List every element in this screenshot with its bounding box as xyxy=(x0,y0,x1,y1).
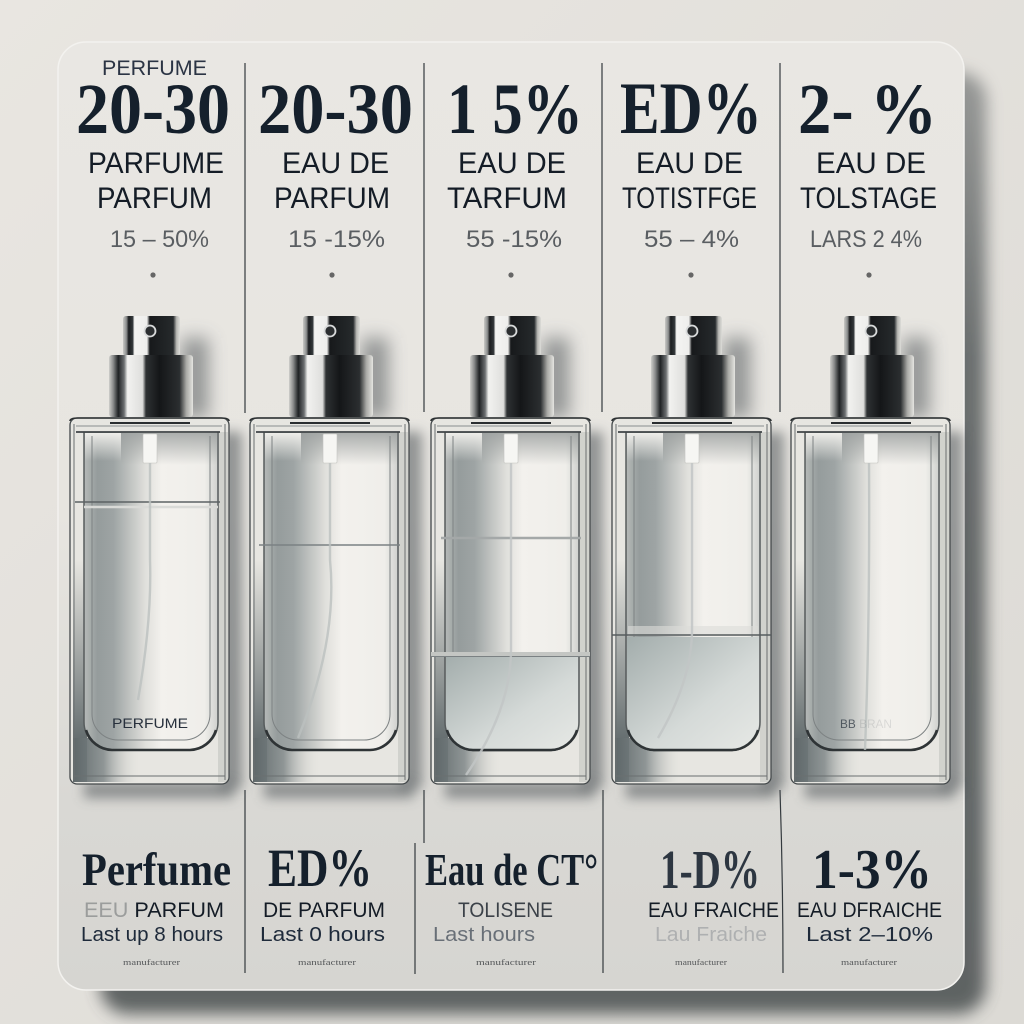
fine print: manufacturer xyxy=(123,958,180,967)
product name: 1-D% xyxy=(660,839,760,900)
dip tube xyxy=(658,463,692,738)
duration: Last hours xyxy=(433,924,535,946)
product name: ED% xyxy=(268,838,372,898)
concentration name line 2: TOTISTFGE xyxy=(622,182,757,215)
bottle 3 xyxy=(431,316,603,798)
duration: Last 0 hours xyxy=(260,924,385,946)
percentage range: 55 -15% xyxy=(466,226,562,253)
big figure: 20-30: 20-30 xyxy=(76,69,230,149)
duration: Lau Fraiche xyxy=(655,924,767,946)
fine print: manufacturer xyxy=(675,958,727,967)
bottle 4 xyxy=(612,316,784,798)
product name: Perfume xyxy=(82,844,231,896)
concentration name: EAU DE xyxy=(282,147,389,180)
product type: DE PARFUM xyxy=(263,899,385,922)
product type: TOLISENE xyxy=(458,899,553,922)
liquid levels xyxy=(441,537,581,539)
dot marker xyxy=(150,272,156,278)
dip tube xyxy=(138,463,150,700)
column 4 footer text xyxy=(648,839,779,967)
column 5 footer text xyxy=(797,839,942,967)
percentage range: 15 – 50% xyxy=(110,226,209,253)
liquid body xyxy=(627,637,759,749)
dot marker xyxy=(329,272,335,278)
dot marker xyxy=(508,272,514,278)
percentage range: 55 – 4% xyxy=(644,226,739,253)
bottle label: PERFUME xyxy=(112,715,188,731)
dip tube xyxy=(865,463,869,750)
dip tube xyxy=(466,463,511,775)
bottle 1 xyxy=(70,316,242,798)
column 5 header text xyxy=(798,69,937,278)
column 3 header text xyxy=(447,69,583,278)
duration: Last up 8 hours xyxy=(81,924,223,946)
liquid level xyxy=(75,501,220,503)
bottle 5 xyxy=(791,316,963,798)
column 1 header text xyxy=(76,57,230,278)
bottle label: BB BRAN xyxy=(840,717,892,731)
column 3 footer text xyxy=(425,845,598,967)
concentration name line 2: PARFUM xyxy=(274,182,390,215)
liquid level xyxy=(259,544,400,546)
percentage range: 15 -15% xyxy=(288,226,385,253)
fine print: manufacturer xyxy=(841,958,897,967)
concentration name line 2: PARFUM xyxy=(97,182,212,215)
liquid surface xyxy=(628,626,758,636)
bottle 2 xyxy=(250,316,422,798)
dot marker xyxy=(688,272,694,278)
dip tube xyxy=(298,463,331,738)
product name: Eau de CT° xyxy=(425,845,598,895)
concentration name: EAU DE xyxy=(816,147,926,180)
dot marker xyxy=(866,272,872,278)
product name: 1-3% xyxy=(812,839,932,901)
liquid body xyxy=(446,656,578,749)
concentration name line 2: TOLSTAGE xyxy=(800,182,937,215)
small title: perfume: PERFUME xyxy=(102,57,207,80)
column 2 header text xyxy=(258,69,413,278)
big figure: 15%: 1 5% xyxy=(447,69,583,149)
concentration name: PARFUME xyxy=(88,147,224,180)
column 2 footer text xyxy=(260,838,385,967)
column 1 footer text xyxy=(81,844,231,967)
percentage range: LARS 2 4% xyxy=(810,226,922,253)
product type: EEU PARFUM xyxy=(84,899,224,922)
fine print: manufacturer xyxy=(298,958,356,967)
duration: Last 2–10% xyxy=(806,924,933,946)
fine print: manufacturer xyxy=(476,958,536,967)
concentration name: EAU DE xyxy=(636,147,743,180)
concentration name: EAU DE xyxy=(458,147,566,180)
big figure: 2-%: 2- % xyxy=(798,69,937,149)
product type: EAU FRAICHE xyxy=(648,899,779,922)
product type: EAU DFRAICHE xyxy=(797,899,942,922)
column 4 header text xyxy=(620,68,762,278)
big figure: ED%: ED% xyxy=(620,68,762,150)
big figure: 20-30: 20-30 xyxy=(258,69,413,149)
concentration name line 2: TARFUM xyxy=(447,182,567,215)
